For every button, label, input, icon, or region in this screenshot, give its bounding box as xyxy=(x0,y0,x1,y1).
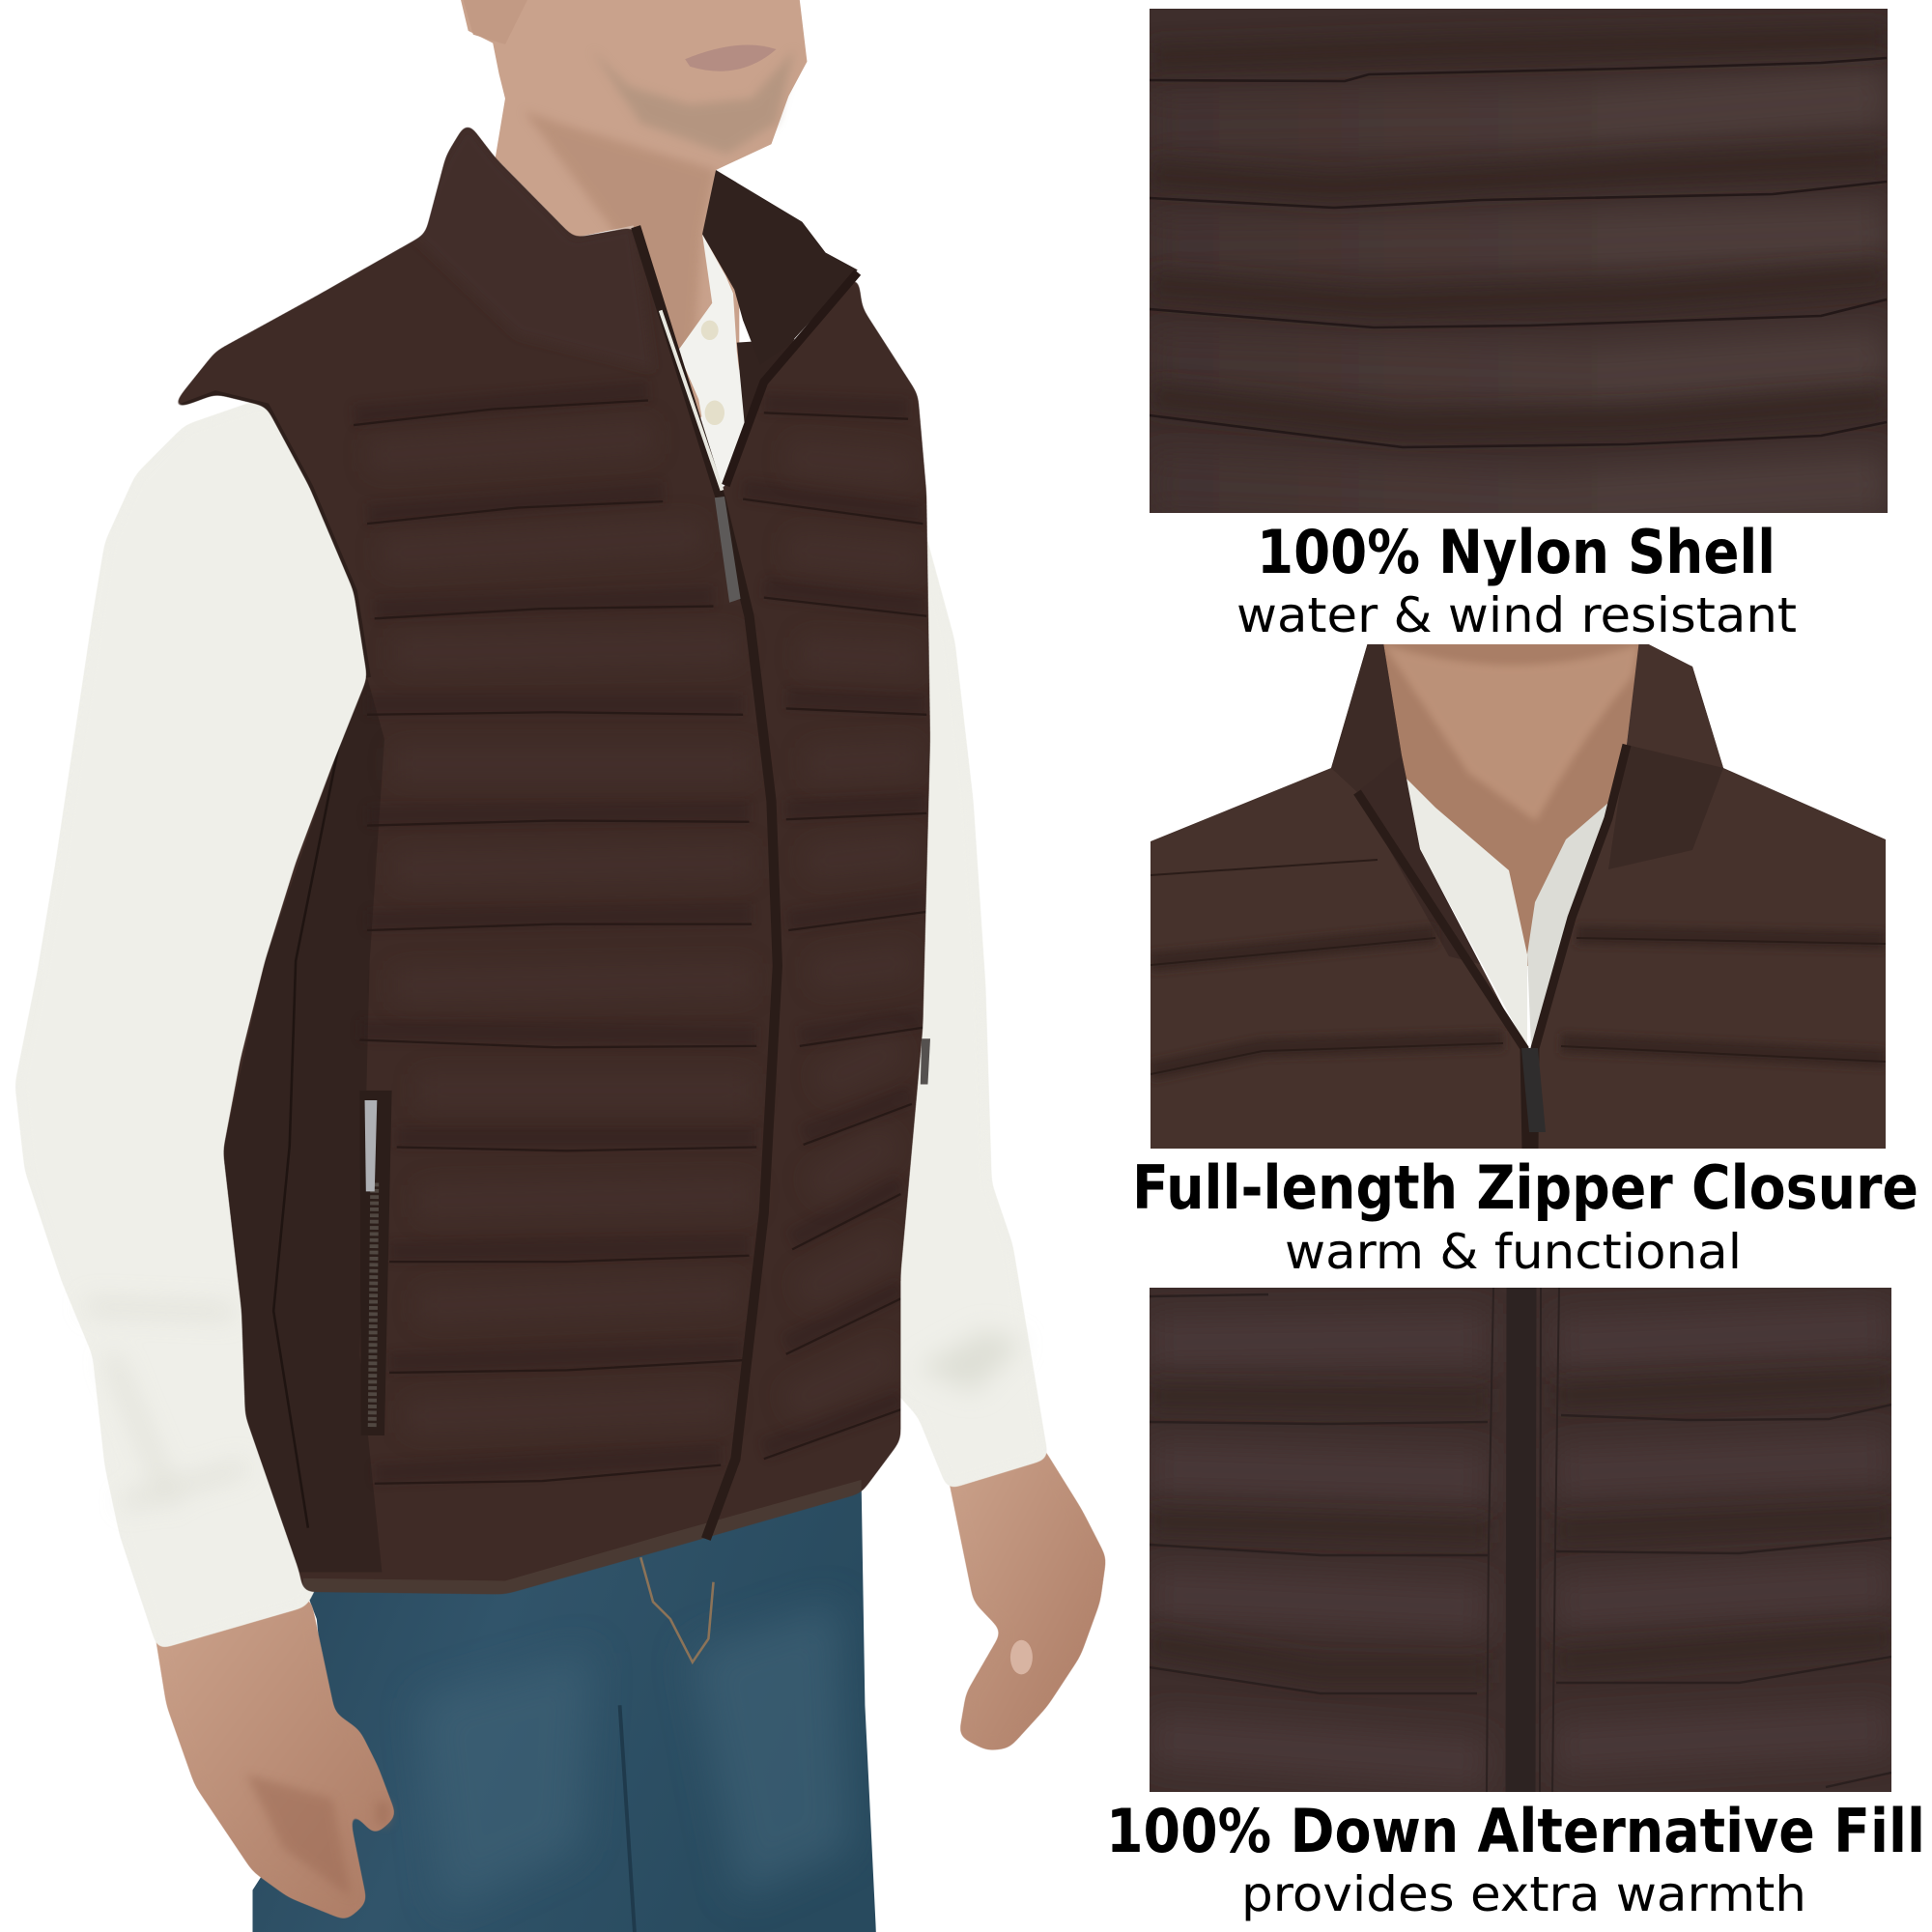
neck skin xyxy=(1381,644,1639,966)
neck shadow xyxy=(524,111,716,419)
seam shadows xyxy=(1151,935,1886,1071)
seams xyxy=(1150,1294,1891,1787)
right cuff shading xyxy=(918,1331,1023,1392)
quilting shadows xyxy=(354,390,926,1474)
zipper puller xyxy=(1521,1048,1546,1132)
jeans xyxy=(246,1466,887,1932)
centre zipper xyxy=(1520,1288,1521,1792)
neck and face xyxy=(461,0,807,431)
panel: zipper close-up xyxy=(1150,638,1888,1150)
left sleeve folds xyxy=(86,1306,246,1503)
vest fabric xyxy=(1150,638,1888,1150)
pocket zipper xyxy=(359,1091,392,1435)
shirt buttons xyxy=(701,321,724,425)
zipper puller xyxy=(715,497,741,603)
gusset behind right zipper xyxy=(727,339,795,486)
right zipper edge xyxy=(725,272,858,486)
jeans stitching xyxy=(620,1557,714,1932)
shirt placket xyxy=(678,234,747,486)
side seam xyxy=(273,727,343,1528)
stubble xyxy=(591,49,795,154)
caption: nylon shell xyxy=(1236,517,1797,643)
zipper white tape xyxy=(661,310,722,491)
left hand xyxy=(154,1597,397,1921)
fabric shadows xyxy=(1150,1381,1891,1671)
vest side panel xyxy=(223,678,384,1573)
subheading: water & wind resistant xyxy=(1236,587,1797,643)
pocket puller xyxy=(365,1100,377,1191)
caption: down alternative fill xyxy=(1106,1796,1925,1922)
fabric highlights xyxy=(1150,1328,1891,1763)
right zipper teeth xyxy=(1534,745,1627,1149)
front collar xyxy=(412,121,653,370)
lips xyxy=(685,44,777,71)
left hand knuckle shading xyxy=(246,1775,389,1897)
heading: 100% Nylon Shell xyxy=(1257,517,1776,587)
seams xyxy=(1151,860,1886,1074)
subheading: provides extra warmth xyxy=(1241,1866,1806,1922)
right hand xyxy=(947,1444,1106,1750)
chin and neck highlight xyxy=(1383,644,1639,821)
jeans faded patches xyxy=(446,1616,847,1883)
left zipper teeth xyxy=(1357,792,1526,1149)
main zipper xyxy=(636,227,778,1539)
ear xyxy=(464,0,527,44)
seams xyxy=(1150,58,1887,447)
placket stitching xyxy=(1487,1288,1559,1792)
right front collar xyxy=(1608,745,1723,869)
armhole binding xyxy=(166,394,367,678)
left pocket xyxy=(359,1091,392,1435)
quilting highlights xyxy=(370,438,918,1417)
main photo: man wearing vest xyxy=(14,0,1106,1932)
right shirt sleeve xyxy=(863,505,1048,1490)
pocket zipper teeth xyxy=(372,1182,375,1430)
hem band xyxy=(303,1480,862,1598)
caption: zipper closure xyxy=(1132,1152,1918,1280)
right hand thumbnail xyxy=(1010,1640,1033,1674)
quilting seams xyxy=(354,401,926,1484)
panel: down alternative fill close-up xyxy=(1150,1288,1891,1792)
panel: nylon shell close-up xyxy=(1150,9,1888,513)
subheading: warm & functional xyxy=(1285,1224,1742,1280)
back collar interior xyxy=(1627,645,1723,768)
shirt left xyxy=(1406,779,1527,1048)
back collar interior xyxy=(702,170,858,365)
fabric shadows xyxy=(1150,39,1887,425)
left shirt sleeve xyxy=(14,397,394,1650)
shirt right xyxy=(1527,803,1608,1048)
left collar xyxy=(1331,642,1402,792)
vest body xyxy=(160,111,949,1614)
right pocket puller xyxy=(921,1038,930,1084)
fabric highlights xyxy=(1298,70,1888,513)
left collar flap xyxy=(1357,755,1488,966)
